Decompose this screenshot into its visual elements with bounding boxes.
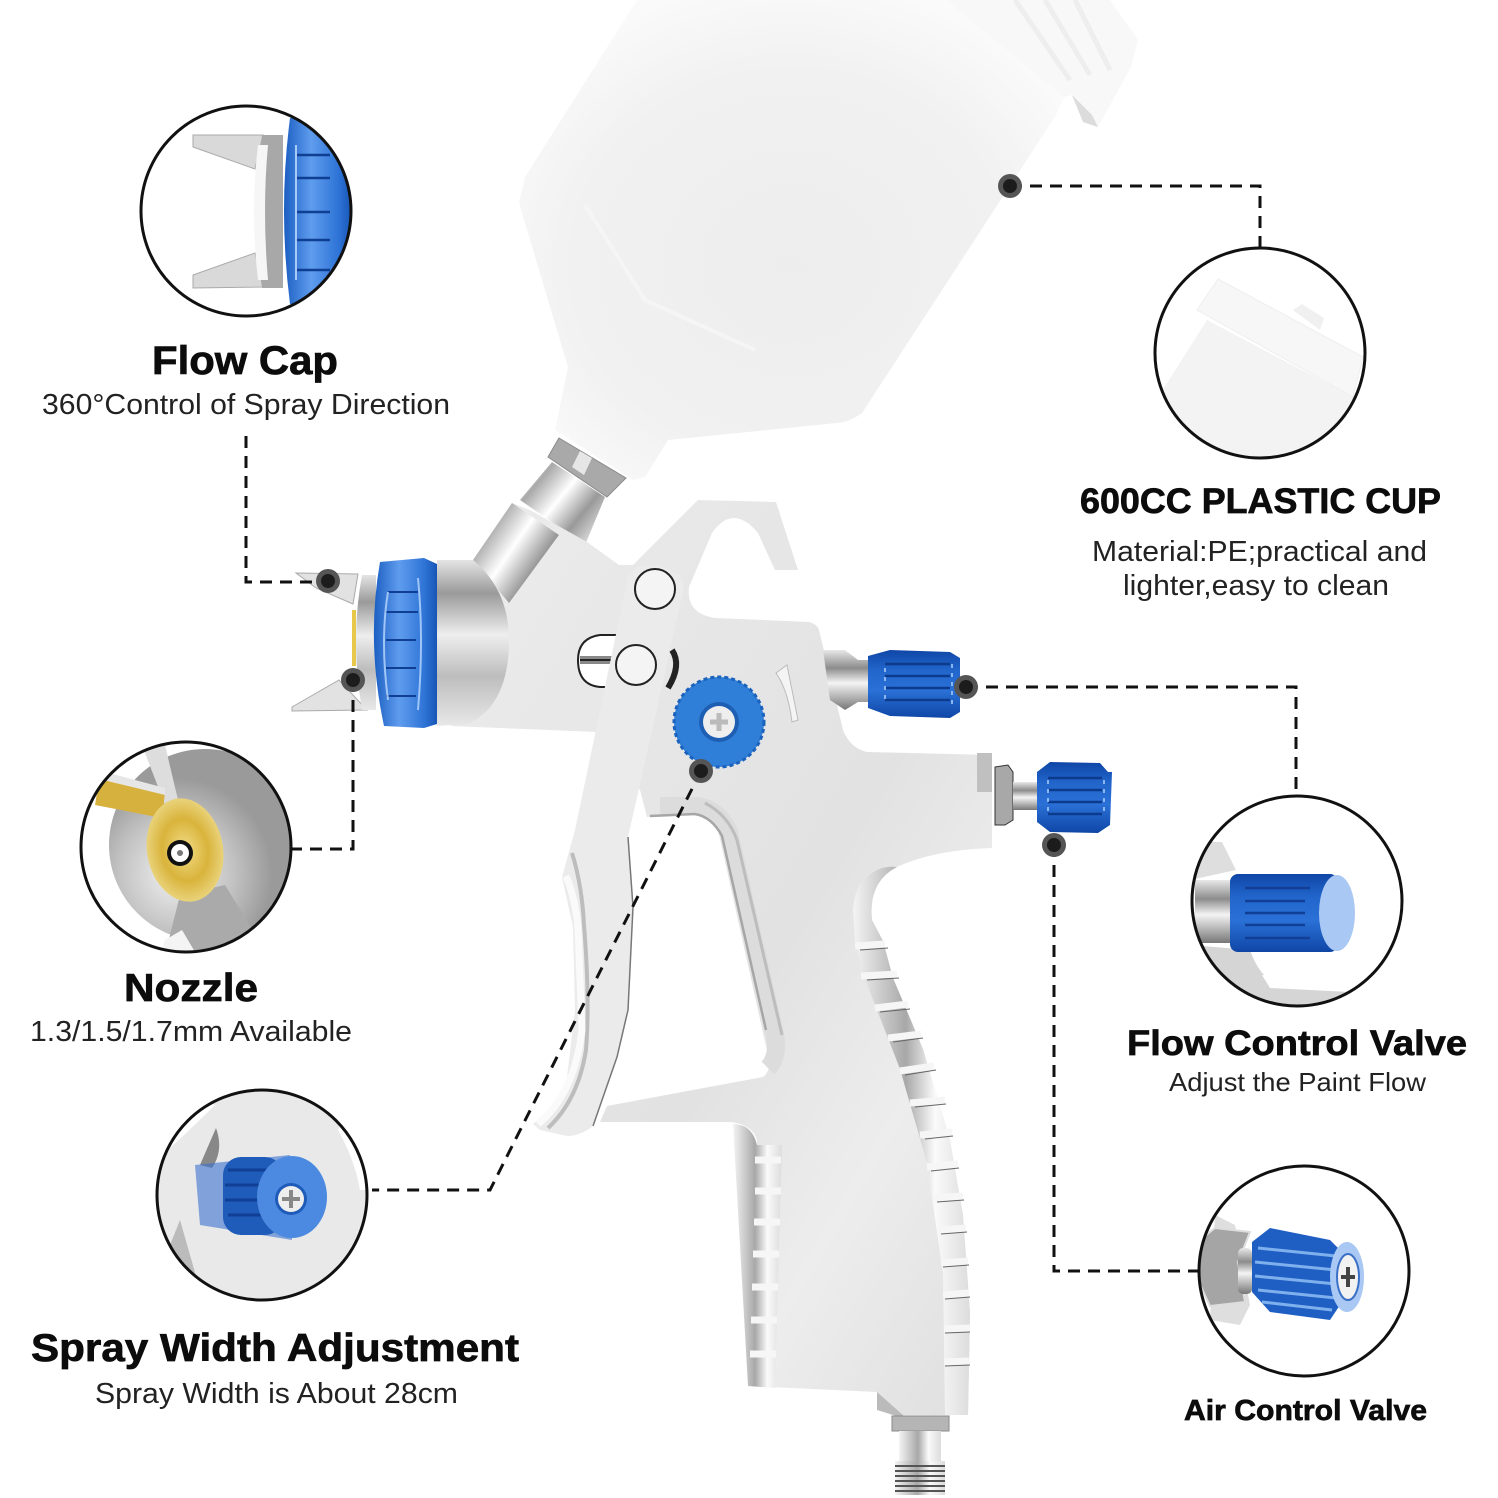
spray width knob — [674, 677, 764, 767]
grip left ribbed band — [733, 1124, 782, 1388]
icon: spray width knob detail — [158, 1092, 366, 1298]
pivot pin upper — [635, 569, 675, 609]
text: flow cap description: 360°Control of Spray Direction — [42, 389, 450, 421]
silver gun head — [437, 560, 509, 726]
leader: spray width — [372, 771, 701, 1190]
heading: flow control valve: Flow Control Valve — [1127, 1024, 1467, 1063]
grip inner bevel — [650, 803, 782, 1068]
panel: flow cap — [42, 106, 450, 421]
text: spray width description: Spray Width is About 28cm — [95, 1378, 458, 1410]
leader: nozzle — [292, 680, 353, 849]
cup connector nut and tube — [520, 438, 626, 545]
heading: spray width adjustment: Spray Width Adjustment — [31, 1327, 519, 1370]
spray width circle outline — [157, 1090, 367, 1300]
mark on body — [776, 665, 798, 722]
leader: air control valve — [1054, 845, 1198, 1271]
blue flow cap ring — [374, 558, 437, 728]
heading: flow cap: Flow Cap — [152, 339, 338, 383]
icon: flow cap detail — [193, 118, 352, 304]
heading: 600cc plastic cup: 600CC PLASTIC CUP — [1080, 482, 1441, 521]
trigger lever — [533, 565, 684, 1136]
marker dots — [316, 174, 1066, 857]
icon: cup detail — [1164, 278, 1364, 456]
text: cup description line 1: Material:PE;practical and — [1092, 536, 1427, 568]
pivot pin lower — [616, 645, 656, 685]
text: nozzle sizes: 1.3/1.5/1.7mm Available — [30, 1016, 352, 1048]
icon: air valve detail — [1198, 1215, 1364, 1325]
leader: flow cap — [246, 436, 328, 582]
heading: air control valve: Air Control Valve — [1184, 1395, 1427, 1427]
angled neck — [473, 503, 559, 603]
text: cup description line 2: lighter,easy to clean — [1123, 570, 1389, 602]
grip right ribbed band — [853, 867, 970, 1415]
leader: cup — [1010, 186, 1260, 248]
cup circle outline — [1155, 248, 1365, 458]
nozzle circle outline — [81, 742, 291, 952]
flow control valve — [823, 650, 960, 718]
air cap fins — [292, 573, 376, 711]
text: flow valve description: Adjust the Paint Flow — [1169, 1067, 1426, 1097]
heading: nozzle: Nozzle — [124, 967, 258, 1010]
air valve circle outline — [1199, 1166, 1409, 1376]
gun body and grip — [451, 500, 992, 1415]
paint cup — [519, 0, 1138, 480]
air control valve — [977, 753, 1112, 833]
icon: nozzle detail — [95, 746, 290, 950]
spray gun illustration — [292, 0, 1138, 1495]
panel: nozzle — [30, 742, 352, 1048]
panel: plastic cup — [1080, 248, 1441, 602]
panel: flow control valve — [1127, 796, 1467, 1097]
air inlet fitting — [877, 1392, 949, 1495]
flow valve circle outline — [1192, 796, 1402, 1006]
flow cap circle outline — [141, 106, 351, 316]
leader: flow control valve — [966, 687, 1296, 795]
panel: air control valve — [1184, 1166, 1427, 1427]
fluid needle slot — [578, 635, 618, 687]
panel: spray width adjustment — [31, 1090, 519, 1410]
icon: flow valve detail — [1195, 842, 1355, 1004]
